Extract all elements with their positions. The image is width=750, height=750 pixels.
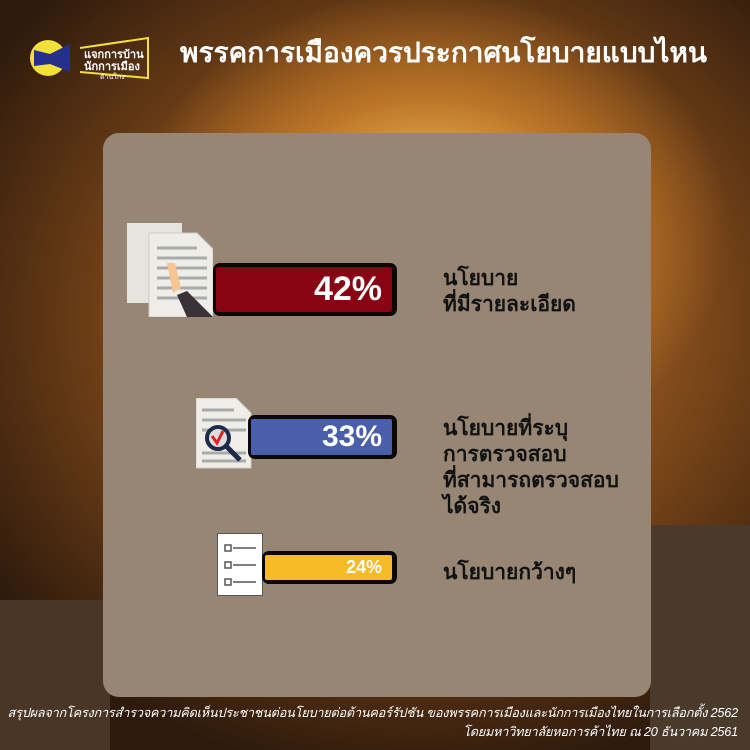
bar: 33% (248, 415, 397, 459)
label: 33% (441, 413, 619, 518)
icon: documents (127, 223, 213, 317)
label: 33%: ได้จริง (443, 495, 501, 518)
label: 24%: นโยบายกว้างๆ (443, 561, 576, 584)
label: 42% (443, 266, 576, 316)
bar: 42% (213, 263, 397, 316)
label: 33%: นโยบายที่ระบุ (443, 417, 568, 440)
label: 33%: การตรวจสอบ (443, 443, 567, 466)
footer text (8, 704, 738, 739)
label: 42%: นโยบาย (443, 267, 518, 290)
logo (30, 36, 149, 81)
bar: 24%: 24% (346, 557, 382, 577)
label: 33%: ที่สามารถตรวจสอบ (443, 469, 619, 492)
bar: 33%: 33% (322, 420, 382, 453)
icon: megaphone: นักการเมือง (84, 60, 140, 73)
panel (103, 133, 651, 697)
icon: megaphone: ต้านโกง (100, 72, 125, 81)
title: พรรคการเมืองควรประกาศนโยบายแบบไหน (180, 37, 707, 68)
icon: megaphone (30, 36, 149, 81)
bar: 24% (262, 551, 397, 584)
footer text: โดยมหาวิทยาลัยหอการค้าไทย ณ 20 ธันวาคม 2561 (463, 725, 738, 739)
icon: magnifier document (196, 398, 252, 468)
bar: 42%: 42% (314, 270, 382, 308)
footer text: สรุปผลจากโครงการสำรวจความคิดเห็นประชาชนต่อนโยบายต่อต้านคอร์รัปชัน ของพรรคการเมืองและนักการเมืองไทยในการเลือกตั้ง 2562 (8, 706, 738, 720)
city skyline (0, 525, 750, 750)
icon: megaphone: แจกการบ้าน (84, 48, 144, 61)
icon: checklist (217, 533, 263, 596)
label: 42%: ที่มีรายละเอียด (443, 293, 576, 316)
